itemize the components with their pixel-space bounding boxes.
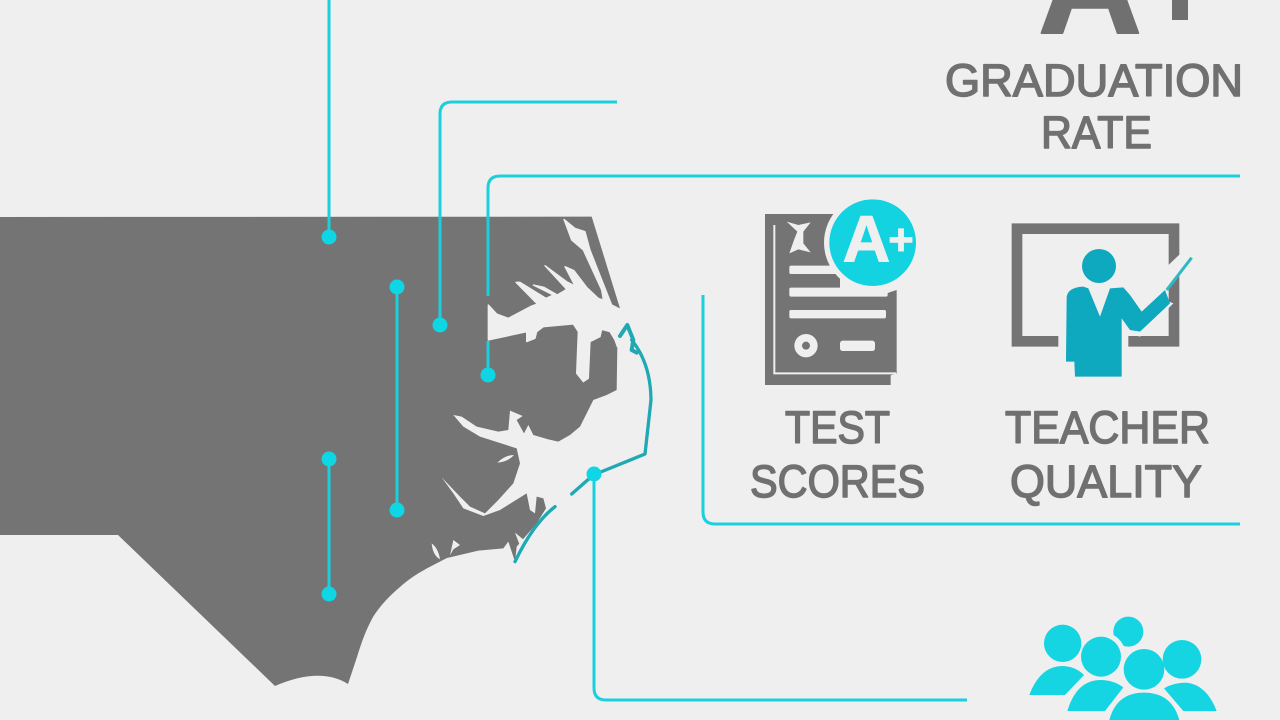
label: test scores: SCORES: [750, 456, 925, 507]
connector line 4: [390, 280, 404, 518]
icon: large A plus grade cropped at top: [1038, 0, 1188, 64]
map: Outer Banks barrier islands: [515, 325, 651, 562]
label: teacher quality: [1005, 402, 1210, 507]
connector line 2: [432, 102, 617, 332]
icon: report card with A plus badge: +: [888, 216, 914, 264]
icon: report card with A plus badge: [765, 194, 921, 385]
connector line 6: bracket around test scores and teacher quality: [703, 295, 1240, 524]
heading: graduation rate: GRADUATION: [945, 55, 1243, 106]
connector line 5: [322, 452, 336, 602]
label: teacher quality: TEACHER: [1005, 402, 1210, 453]
heading: graduation rate: [945, 55, 1243, 158]
icon: teacher at board: [1017, 229, 1192, 382]
map: North Carolina silhouette: [0, 217, 651, 686]
connector line 7: [586, 466, 967, 700]
map: small inlets: [432, 455, 524, 559]
connector line 1: [322, 0, 336, 244]
label: test scores: TEST: [785, 402, 890, 453]
heading: graduation rate: RATE: [1041, 107, 1152, 158]
label: test scores: [750, 402, 925, 507]
connector line 3: [480, 176, 1240, 382]
map: Albemarle Sound cutout: [488, 219, 628, 382]
label: teacher quality: QUALITY: [1010, 456, 1202, 507]
icon: group of people: [1029, 617, 1217, 720]
icon: report card with A plus badge: A: [843, 202, 890, 276]
